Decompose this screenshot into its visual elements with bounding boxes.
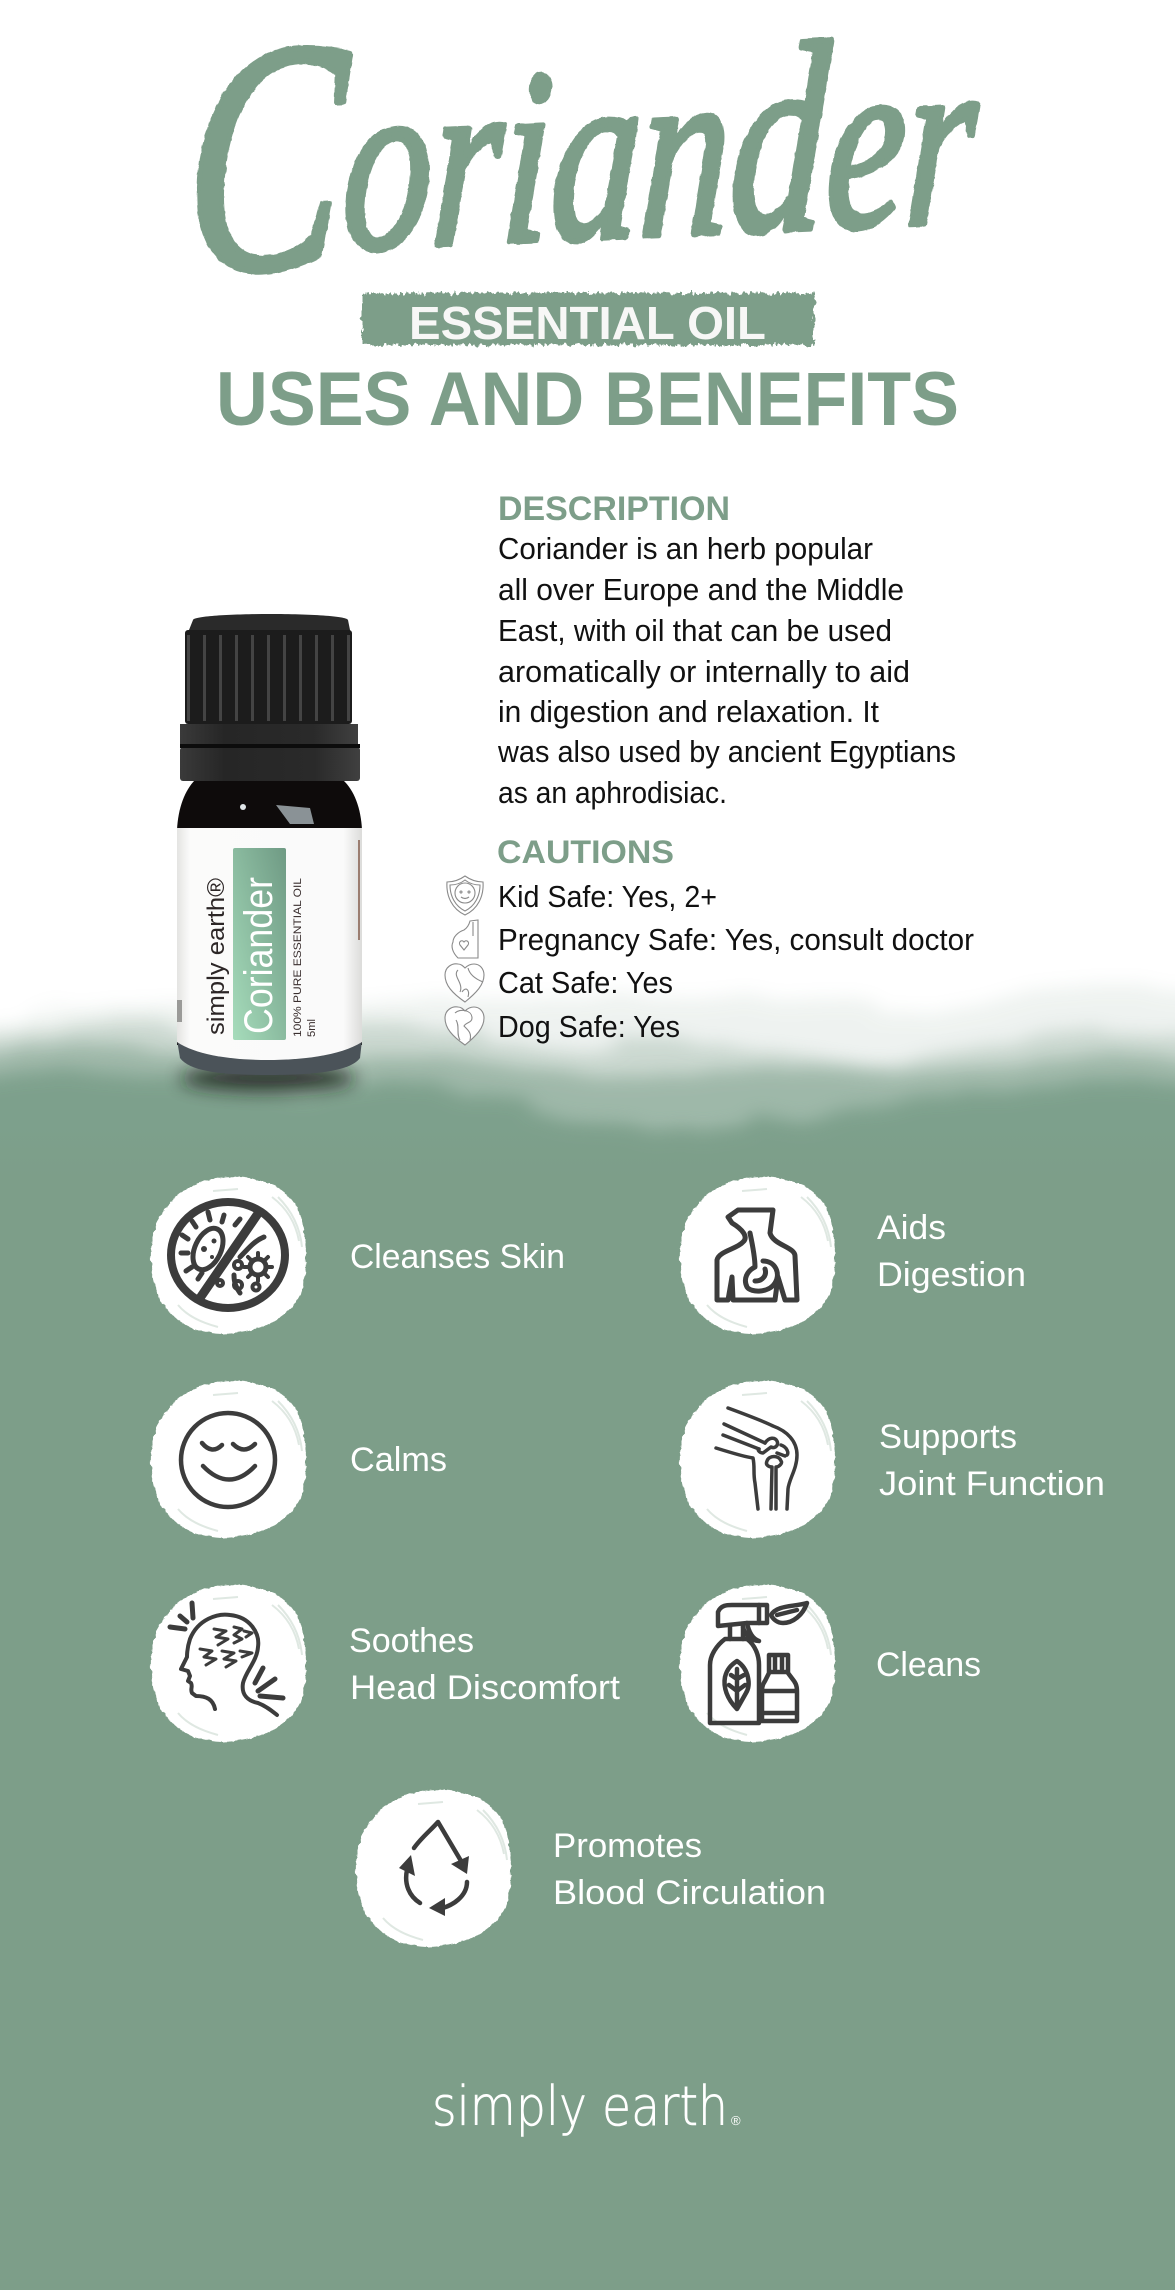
logo: Simply Earth: simply earth — [432, 2075, 728, 2138]
label — [877, 1209, 1026, 1294]
section: description — [497, 490, 956, 810]
logo: Simply Earth: ® — [731, 2113, 741, 2128]
benefit: Aids Digestion — [680, 1177, 1026, 1334]
bottle base — [177, 1040, 362, 1075]
label: Cleans — [876, 1646, 981, 1684]
icon: dog heart — [445, 1007, 484, 1045]
label: Supports — [879, 1418, 1017, 1456]
subtitle: Essential Oil: ESSENTIAL OIL — [409, 297, 766, 349]
title: Coriander: orian — [338, 10, 737, 304]
label: Cleanses Skin — [350, 1238, 565, 1276]
product: essential oil bottle — [177, 614, 362, 1075]
label: Head Discomfort — [350, 1669, 621, 1707]
label side details — [358, 840, 360, 940]
label: Promotes — [553, 1827, 702, 1865]
caution: cat safe: Cat Safe: Yes — [498, 966, 673, 1000]
benefit: Cleanses Skin — [151, 1177, 565, 1334]
label — [553, 1827, 826, 1912]
label: Soothes — [349, 1622, 474, 1660]
label: Calms — [350, 1441, 447, 1479]
description text: as an aphrodisiac. — [498, 776, 727, 810]
icon: germs crossed out — [151, 1177, 306, 1334]
bottle glass — [177, 780, 362, 1045]
description text: in digestion and relaxation. It — [498, 695, 880, 729]
icon: calm face — [151, 1381, 306, 1538]
description text: all over Europe and the Middle — [498, 573, 904, 607]
label colour panel — [233, 848, 286, 1040]
description text: aromatically or internally to aid — [498, 655, 910, 689]
description text: East, with oil that can be used — [498, 614, 892, 648]
icon: knee joint — [680, 1381, 835, 1538]
benefit: Soothes Head Discomfort — [151, 1585, 621, 1742]
label: volume: 5ml — [306, 1019, 318, 1037]
icon: cat heart — [445, 964, 484, 1002]
cautions heading: CAUTIONS — [497, 834, 674, 870]
wrap label — [177, 828, 362, 1060]
description heading: DESCRIPTION — [498, 490, 730, 528]
glass highlight — [276, 805, 314, 824]
heading: Uses and Benefits: USES AND BENEFITS — [216, 357, 959, 442]
benefit: Supports Joint Function — [680, 1381, 1105, 1538]
label: Aids — [877, 1209, 946, 1247]
description text: Coriander is an herb popular — [498, 532, 873, 566]
icon: torso with stomach — [680, 1177, 835, 1334]
label — [349, 1622, 621, 1707]
icon: pregnancy — [452, 920, 478, 958]
bottle shadow — [180, 1065, 356, 1091]
benefit: Cleans — [680, 1585, 981, 1742]
label: brand: simply earth® — [203, 878, 230, 1035]
label: Joint Function — [879, 1465, 1105, 1503]
label: oil name: Coriander — [237, 877, 281, 1034]
label: purity: 100% PURE ESSENTIAL OIL — [292, 878, 304, 1037]
icon: spray bottle and oil bottle — [680, 1585, 835, 1742]
description text — [497, 532, 956, 810]
caution: pregnancy safe: Pregnancy Safe: Yes, consult doctor — [498, 923, 974, 957]
background: watercolor wash into green panel — [0, 990, 1175, 1240]
benefit: Promotes Blood Circulation — [356, 1790, 826, 1947]
title: Coriander — [179, 0, 986, 345]
description text: was also used by ancient Egyptians — [497, 735, 956, 769]
section: cautions — [445, 834, 974, 1045]
benefit: Calms — [151, 1381, 447, 1538]
label — [879, 1418, 1105, 1503]
caution: kid safe: Kid Safe: Yes, 2+ — [498, 880, 717, 914]
icon: head with pain marks — [151, 1585, 306, 1742]
cap — [180, 614, 360, 781]
brush banner — [362, 293, 814, 345]
panel: solid green benefits background — [0, 1120, 1175, 2290]
label: Blood Circulation — [553, 1874, 826, 1912]
label: Digestion — [877, 1256, 1026, 1294]
icon: kid safe shield — [447, 876, 483, 915]
caution: dog safe: Dog Safe: Yes — [498, 1010, 680, 1044]
icon: circulation arrows drop — [356, 1790, 511, 1947]
